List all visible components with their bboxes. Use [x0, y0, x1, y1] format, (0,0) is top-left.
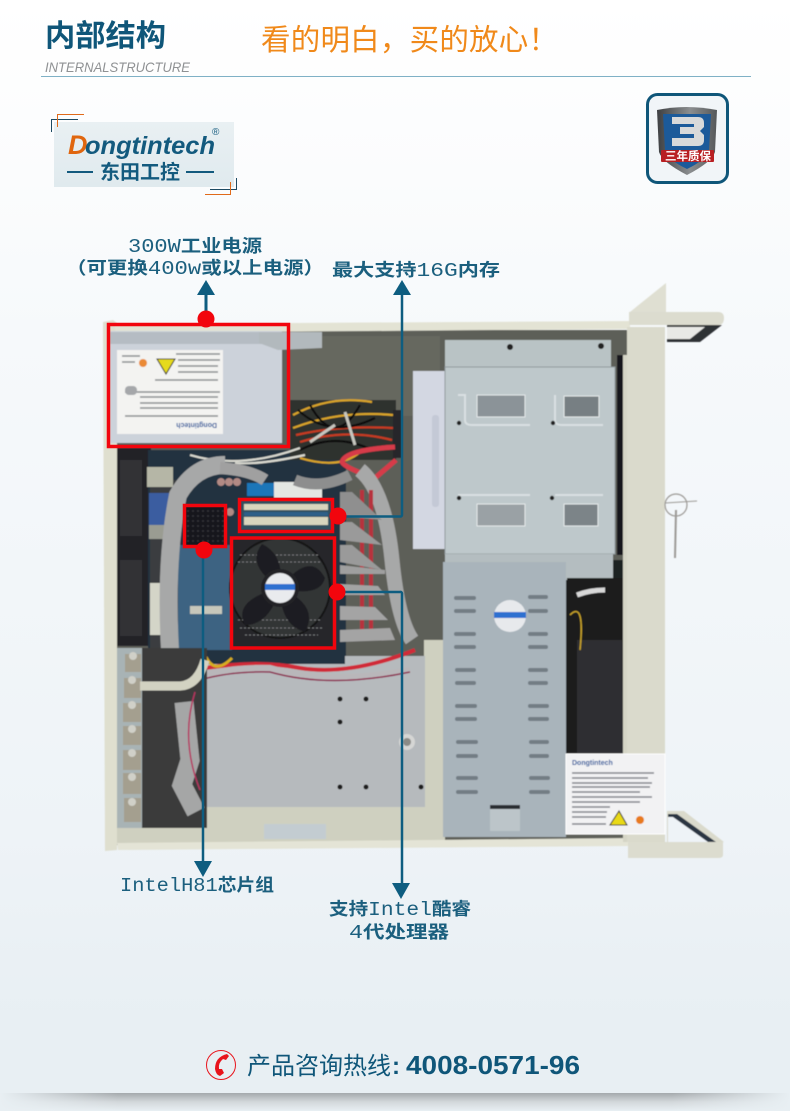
- motherboard: [147, 450, 346, 656]
- callout: CPU: 4代处理器: [349, 919, 450, 944]
- callout: power supply: 300W 工业电源: [128, 233, 263, 258]
- spec sticker: Dongtintech: [572, 760, 613, 767]
- badge: three year warranty: 三年质保: [665, 149, 711, 163]
- memory slots: [240, 500, 332, 530]
- top handle: [629, 312, 724, 342]
- callout: memory: [240, 257, 500, 532]
- upper drive cage: [413, 340, 623, 580]
- logo: Dongtintech: ®: [212, 127, 220, 138]
- callout: power supply: （可更换 400w 或以上电源）: [66, 255, 324, 280]
- lower drive cage: [443, 562, 566, 837]
- callout: chipset: IntelH81 芯片组: [120, 872, 274, 897]
- bottom handle: [628, 811, 724, 858]
- callout: chipset: [120, 506, 274, 897]
- logo: Dongtintech: 东田工控: [100, 160, 180, 184]
- SATA cable: [342, 447, 396, 478]
- ribbon cables: [169, 465, 412, 650]
- logo: Dongtintech: [52, 114, 236, 194]
- photo: industrial chassis interior: [103, 283, 724, 858]
- callout: power supply: [66, 233, 324, 446]
- chipset heatsink: [185, 506, 226, 546]
- icon: phone: [206, 1050, 236, 1080]
- heading: section title: [41, 20, 751, 77]
- rear case fans: [117, 448, 151, 646]
- CPU cooler fan: [230, 538, 334, 647]
- logo: Dongtintech: ongtintech: [85, 132, 215, 160]
- expansion slot brackets: [117, 648, 207, 828]
- logo: Dongtintech: D: [68, 130, 88, 160]
- chassis shell and interior: [103, 320, 630, 851]
- footer hotline: 4008-0571-96: [406, 1052, 580, 1080]
- front panel: [623, 283, 666, 842]
- footer hotline: :: [392, 1053, 400, 1080]
- heading: section title: INTERNALSTRUCTURE: [45, 59, 191, 75]
- callout: CPU: [232, 538, 472, 944]
- footer hotline: 产品咨询热线: [247, 1053, 391, 1080]
- lock key: [665, 494, 697, 558]
- slogan: 看的明白，买的放心！: [261, 24, 558, 57]
- callout: memory: 最大支持 16G 内存: [332, 257, 500, 282]
- heading: section title: 内部结构: [45, 20, 166, 53]
- rear fan and wires: [567, 578, 623, 754]
- spec sticker: [566, 754, 665, 834]
- badge: three year warranty: [648, 94, 728, 182]
- bottom shadow band: [0, 1093, 790, 1111]
- lower mounting plate: [200, 650, 425, 839]
- footer hotline: [206, 1050, 580, 1080]
- PSU: Dongtintech: [176, 421, 217, 428]
- PSU: [110, 331, 322, 443]
- power cables bundle: [190, 400, 402, 463]
- callout: CPU: 支持Intel 酷睿: [329, 896, 472, 921]
